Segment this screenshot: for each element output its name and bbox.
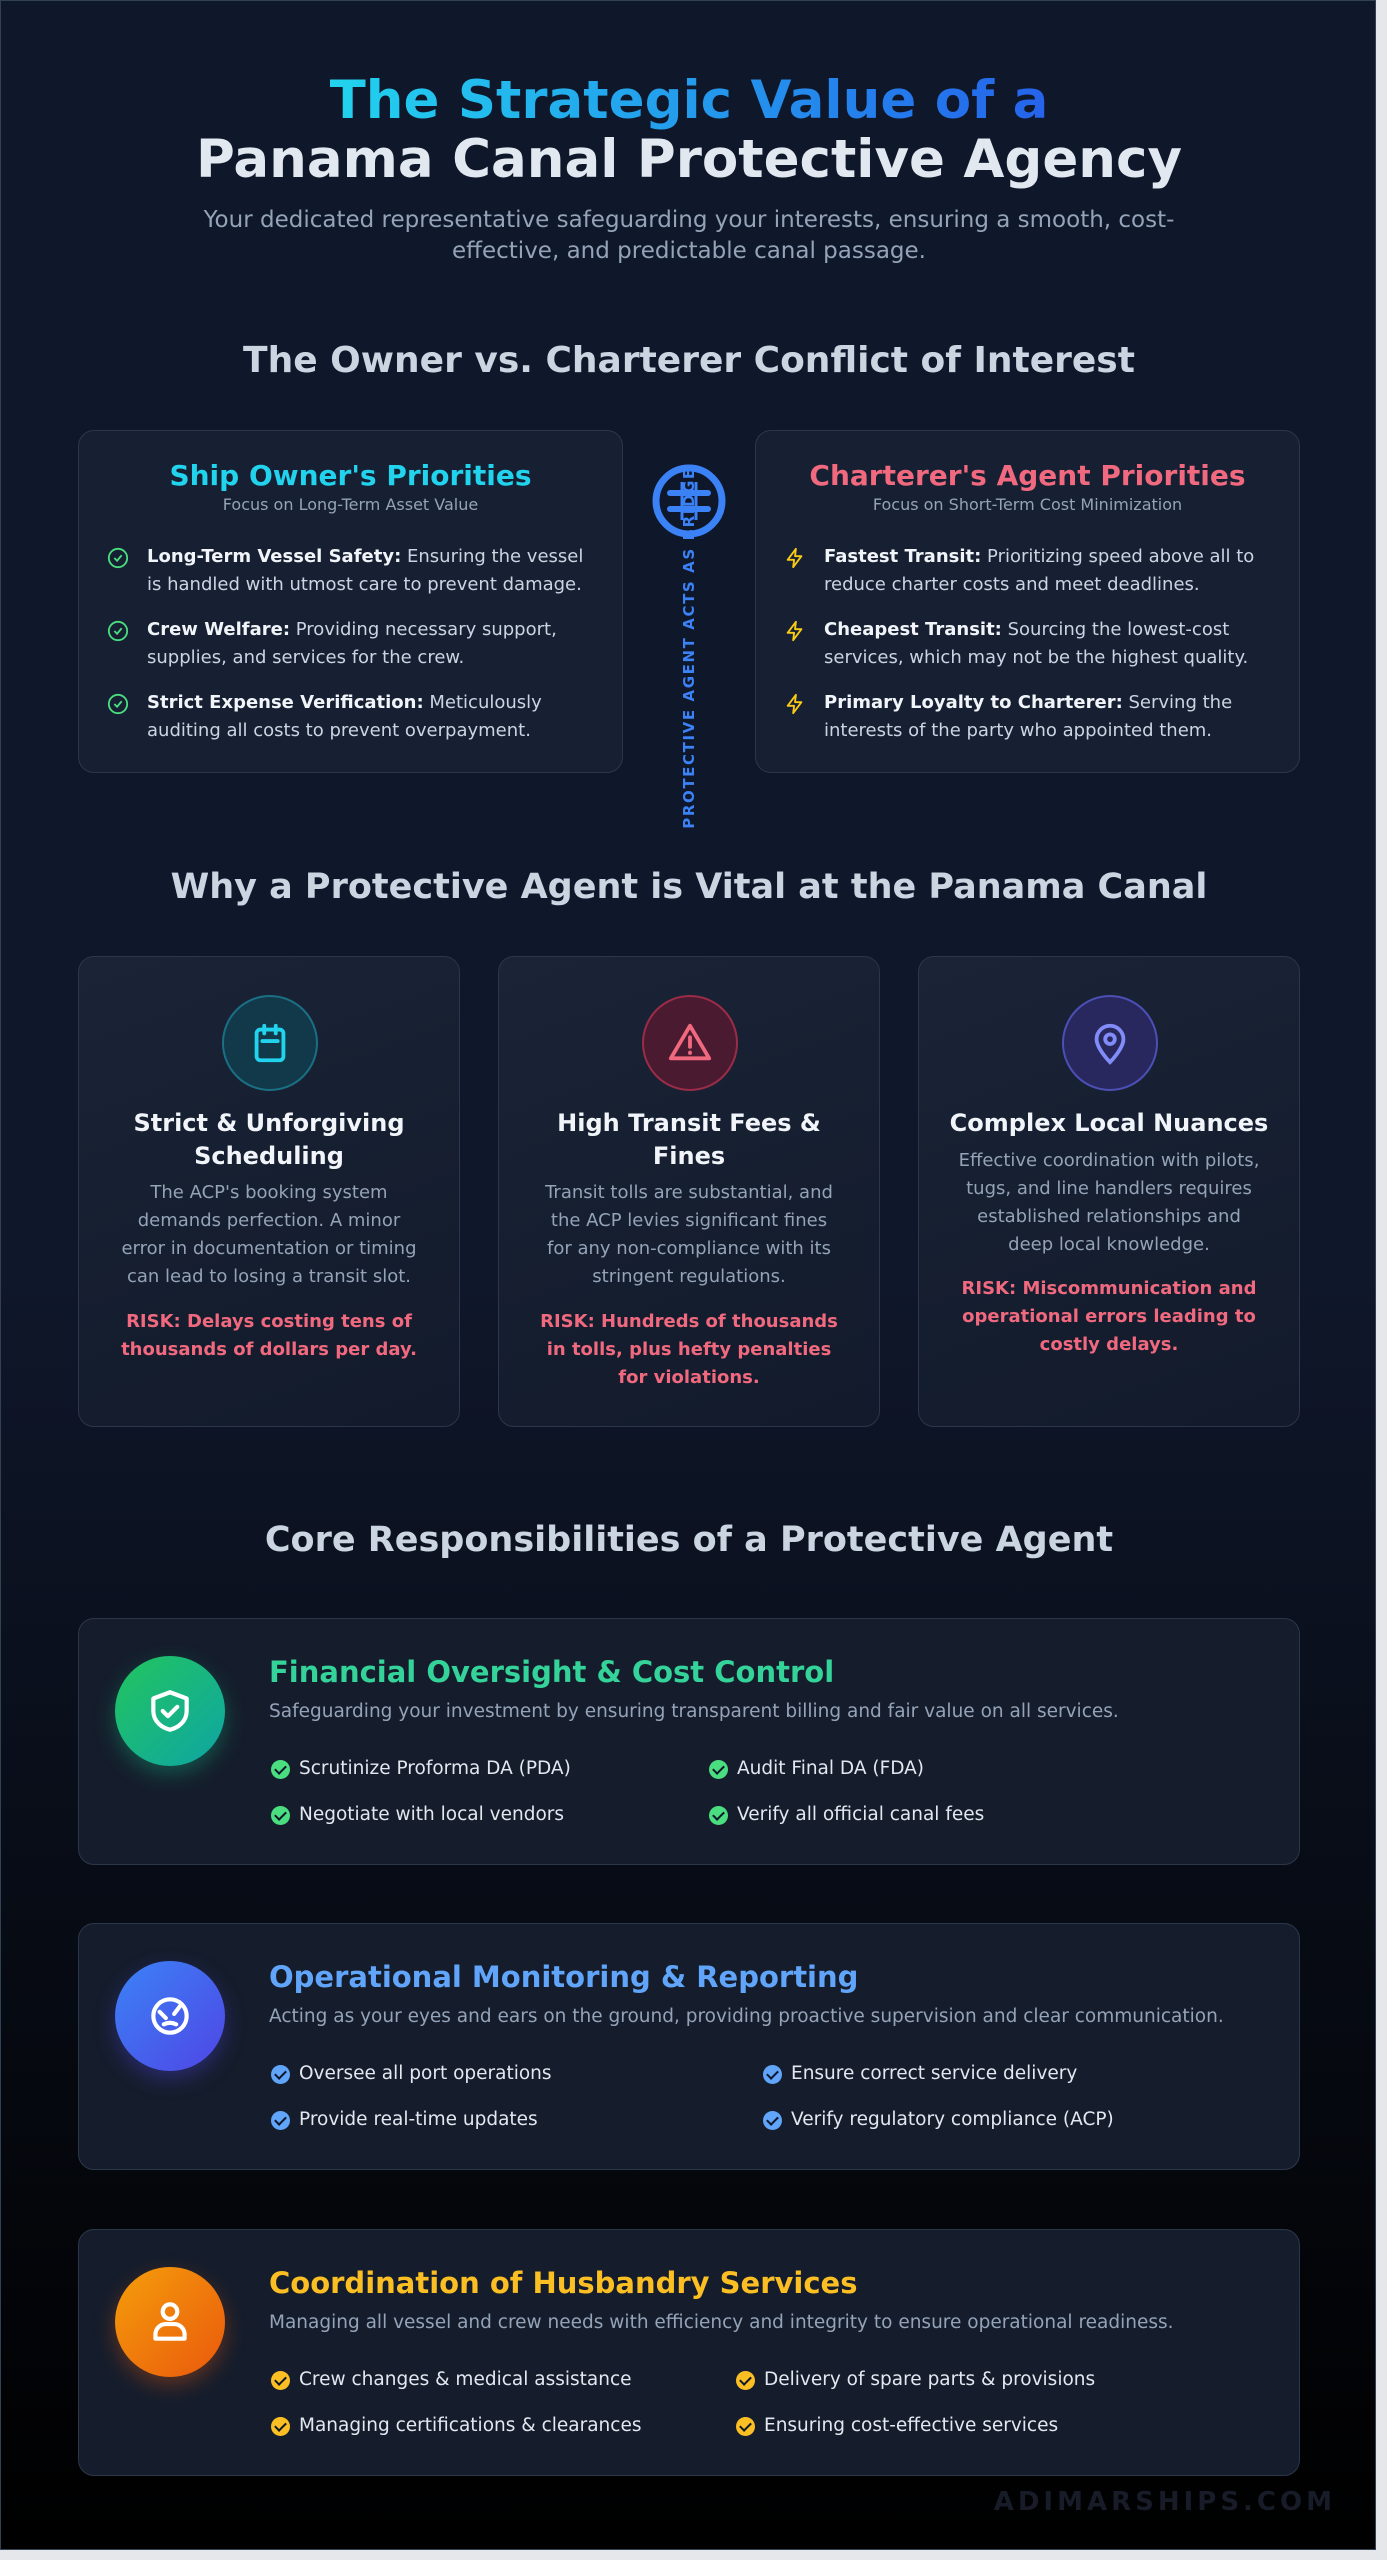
description: Managing all vessel and crew needs with efficiency and integrity to ensure operational readiness.	[269, 2312, 1174, 2333]
icon: person	[115, 2267, 225, 2377]
heading: core responsibilities: Core Responsibilities of a Protective Agent	[265, 1520, 1113, 1560]
card description: Effective coordination with pilots, tugs, and line handlers requires established relationships and deep local knowledge.	[959, 1150, 1259, 1255]
vertical label: protective agent acts as bridge: PROTECTIVE AGENT ACTS AS BRIDGE	[680, 467, 698, 829]
heading: conflict of interest: The Owner vs. Charterer Conflict of Interest	[243, 340, 1135, 381]
risk text: RISK: Delays costing tens of thousands of dollars per day.	[121, 1311, 417, 1360]
card title: Complex Local Nuances	[950, 1109, 1268, 1137]
bullets: Audit Final DA (FDA)	[737, 1758, 924, 1779]
bullets: Provide real-time updates	[299, 2109, 538, 2130]
subtitle: Your dedicated representative safeguarding your interests, ensuring a smooth, cost-effective, and predictable canal passage.	[204, 207, 1174, 264]
bullets	[271, 2063, 1114, 2130]
bullets: Crew changes & medical assistance	[299, 2369, 632, 2390]
bullets: Oversee all port operations	[299, 2063, 552, 2084]
title: Panama Canal Protective Agency	[196, 129, 1182, 190]
icon: calendar	[222, 995, 318, 1091]
card: local nuances	[918, 956, 1300, 1427]
risk text: RISK: Miscommunication and operational errors leading to costly delays.	[962, 1278, 1256, 1355]
item: cheapest transit: Cheapest Transit: Sourcing the lowest-cost services, which may not be the highest quality.	[824, 619, 1248, 668]
panel: financial oversight	[78, 1618, 1300, 1865]
bullets: Negotiate with local vendors	[299, 1804, 564, 1825]
icon: bridge connector	[652, 464, 726, 538]
title: The Strategic Value of a	[330, 70, 1048, 131]
panel: husbandry services	[78, 2229, 1300, 2476]
bullets: Ensuring cost-effective services	[764, 2415, 1058, 2436]
item: vessel safety: Long-Term Vessel Safety: Ensuring the vessel is handled with utmost care to prevent damage.	[147, 546, 583, 595]
icon: monitoring	[115, 1961, 225, 2071]
heading: why vital: Why a Protective Agent is Vital at the Panama Canal	[171, 867, 1207, 907]
footer watermark: ADIMARSHIPS.COM	[994, 2487, 1336, 2517]
panel: operational monitoring	[78, 1923, 1300, 2170]
card description: The ACP's booking system demands perfection. A minor error in documentation or timing can lead to losing a transit slot.	[121, 1182, 417, 1287]
bullets: Verify all official canal fees	[737, 1804, 984, 1825]
icon: warning	[642, 995, 738, 1091]
bullets: Delivery of spare parts & provisions	[764, 2369, 1095, 2390]
title: Coordination of Husbandry Services	[269, 2266, 857, 2300]
panel title: Charterer's Agent Priorities	[809, 459, 1246, 492]
card: scheduling	[78, 956, 460, 1427]
panel: ship owner's priorities	[78, 430, 623, 773]
bullets: Managing certifications & clearances	[299, 2415, 641, 2436]
icon: location pin	[1062, 995, 1158, 1091]
description: Safeguarding your investment by ensuring transparent billing and fair value on all services.	[269, 1701, 1119, 1722]
item: primary loyalty: Primary Loyalty to Charterer: Serving the interests of the party who appointed them.	[824, 692, 1232, 741]
bullets: Scrutinize Proforma DA (PDA)	[299, 1758, 571, 1779]
bullets: Ensure correct service delivery	[791, 2063, 1077, 2084]
card description: Transit tolls are substantial, and the ACP levies significant fines for any non-compliance with its stringent regulations.	[545, 1182, 833, 1287]
bullets: Verify regulatory compliance (ACP)	[791, 2109, 1114, 2130]
description: Acting as your eyes and ears on the ground, providing proactive supervision and clear communication.	[269, 2006, 1224, 2027]
bullets	[271, 2369, 1095, 2436]
item: crew welfare: Crew Welfare: Providing necessary support, supplies, and services for the crew.	[147, 619, 557, 668]
bullets	[271, 1758, 984, 1825]
item: fastest transit: Fastest Transit: Prioritizing speed above all to reduce charter costs and meet deadlines.	[824, 546, 1254, 595]
panel subtitle: Focus on Long-Term Asset Value	[223, 495, 478, 514]
risk text: RISK: Hundreds of thousands in tolls, plus hefty penalties for violations.	[540, 1311, 838, 1388]
title: Operational Monitoring & Reporting	[269, 1960, 858, 1994]
panel: charterer's agent priorities	[755, 430, 1300, 773]
card: fees	[498, 956, 880, 1427]
card title: Strict & Unforgiving Scheduling	[133, 1109, 405, 1170]
title: Financial Oversight & Cost Control	[269, 1655, 834, 1689]
panel subtitle: Focus on Short-Term Cost Minimization	[873, 495, 1182, 514]
icon: shield	[115, 1656, 225, 1766]
item: expense verification: Strict Expense Verification: Meticulously auditing all costs to prevent overpayment.	[147, 692, 542, 741]
title	[196, 70, 1182, 190]
card title: High Transit Fees & Fines	[557, 1109, 821, 1170]
panel title: Ship Owner's Priorities	[169, 459, 532, 492]
